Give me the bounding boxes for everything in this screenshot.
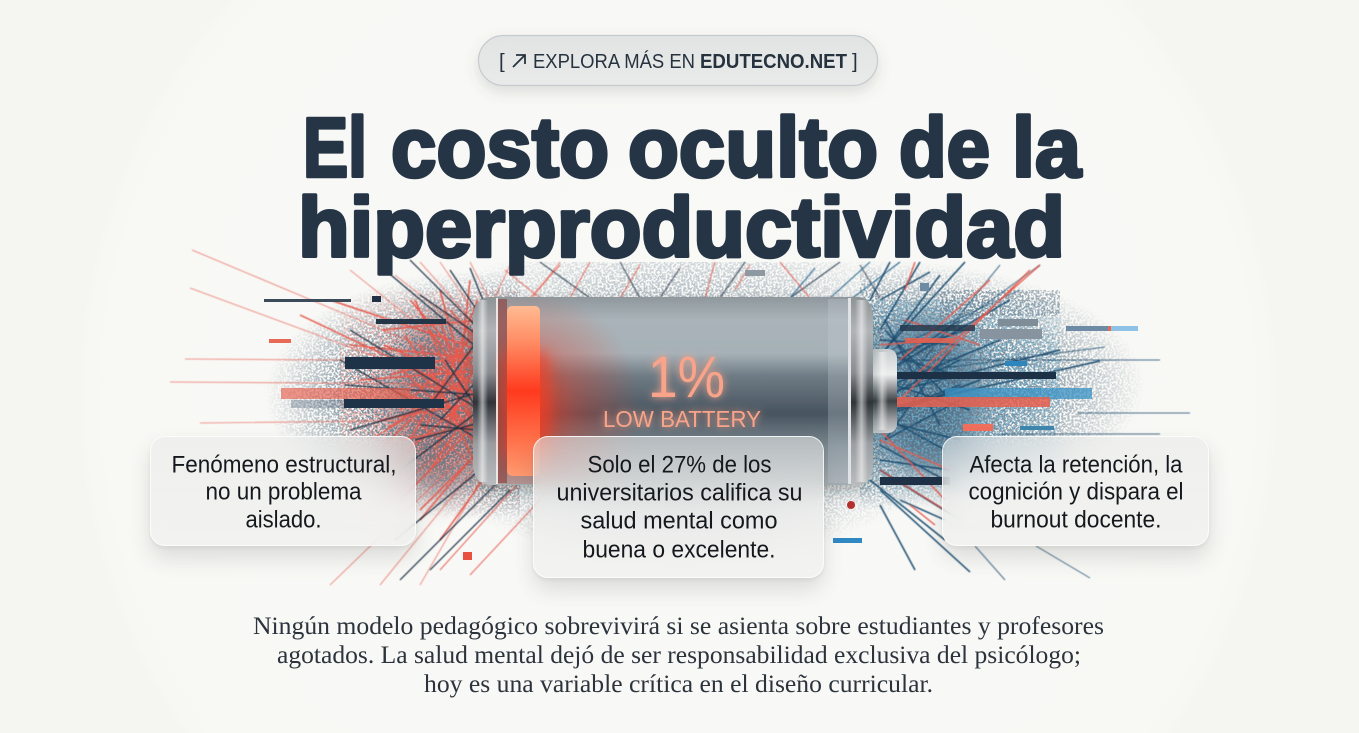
icon: arrow up-right: [513, 55, 525, 67]
card: 27 percent statistic: buena o excelente.: [582, 536, 776, 564]
left dark rays: [340, 260, 510, 580]
title: [298, 100, 1082, 274]
title: hiperproductividad: [298, 180, 1065, 274]
card: structural phenomenon: aislado.: [246, 506, 322, 534]
title: de: [899, 100, 990, 194]
link pill: EXPLORA MÁS EN: [533, 50, 695, 73]
title: oculto: [628, 100, 878, 194]
battery glass body: [473, 297, 873, 485]
card: structural phenomenon: no un problema: [206, 478, 362, 506]
card: 27 percent statistic: [533, 436, 824, 578]
card: 27 percent statistic: Solo el 27% de los: [588, 452, 772, 478]
stipple clouds: [260, 255, 1150, 585]
card: retention and burnout: [942, 436, 1209, 546]
left red rays: [170, 250, 560, 585]
red charge cell: [505, 306, 549, 476]
right blue and dark rays: [870, 262, 1190, 580]
link pill: [: [499, 50, 505, 73]
title: la: [1012, 100, 1082, 194]
card: 27 percent statistic: universitarios califica su: [556, 480, 802, 506]
1% reading: 1%: [648, 345, 725, 410]
closing paragraph: Ningún modelo pedagógico sobrevivirá si se asienta sobre estudiantes y profesores: [253, 613, 1104, 640]
card: retention and burnout: burnout docente.: [990, 506, 1162, 534]
card: retention and burnout: Afecta la retención, la: [970, 452, 1183, 478]
dense core shading: [390, 317, 983, 493]
battery right metal collar: [848, 297, 873, 485]
center top rays: [505, 262, 900, 300]
closing paragraph: hoy es una variable crítica en el diseño curricular.: [424, 671, 933, 698]
link pill: EDUTECNO.NET: [700, 50, 847, 73]
closing paragraph: agotados. La salud mental dejó de ser responsabilidad exclusiva del psicólogo;: [277, 642, 1081, 669]
card: retention and burnout: cognición y dispara el: [968, 478, 1184, 506]
low battery label: LOW BATTERY: [603, 406, 761, 432]
battery terminal: [866, 349, 897, 433]
link pill: ]: [852, 50, 858, 73]
left data bars: [264, 296, 472, 560]
right red rays: [880, 262, 1040, 525]
card: 27 percent statistic: salud mental como: [580, 508, 778, 534]
closing paragraph: [253, 613, 1104, 698]
title: costo: [391, 100, 609, 194]
link pill: [478, 36, 878, 86]
card: structural phenomenon: Fenómeno estructural,: [172, 452, 396, 478]
battery left metal collar: [473, 297, 507, 485]
explosion of data lines behind the battery: [170, 249, 1191, 586]
right data bars: [745, 270, 1138, 543]
card: structural phenomenon: [150, 436, 416, 546]
title: El: [303, 100, 367, 194]
